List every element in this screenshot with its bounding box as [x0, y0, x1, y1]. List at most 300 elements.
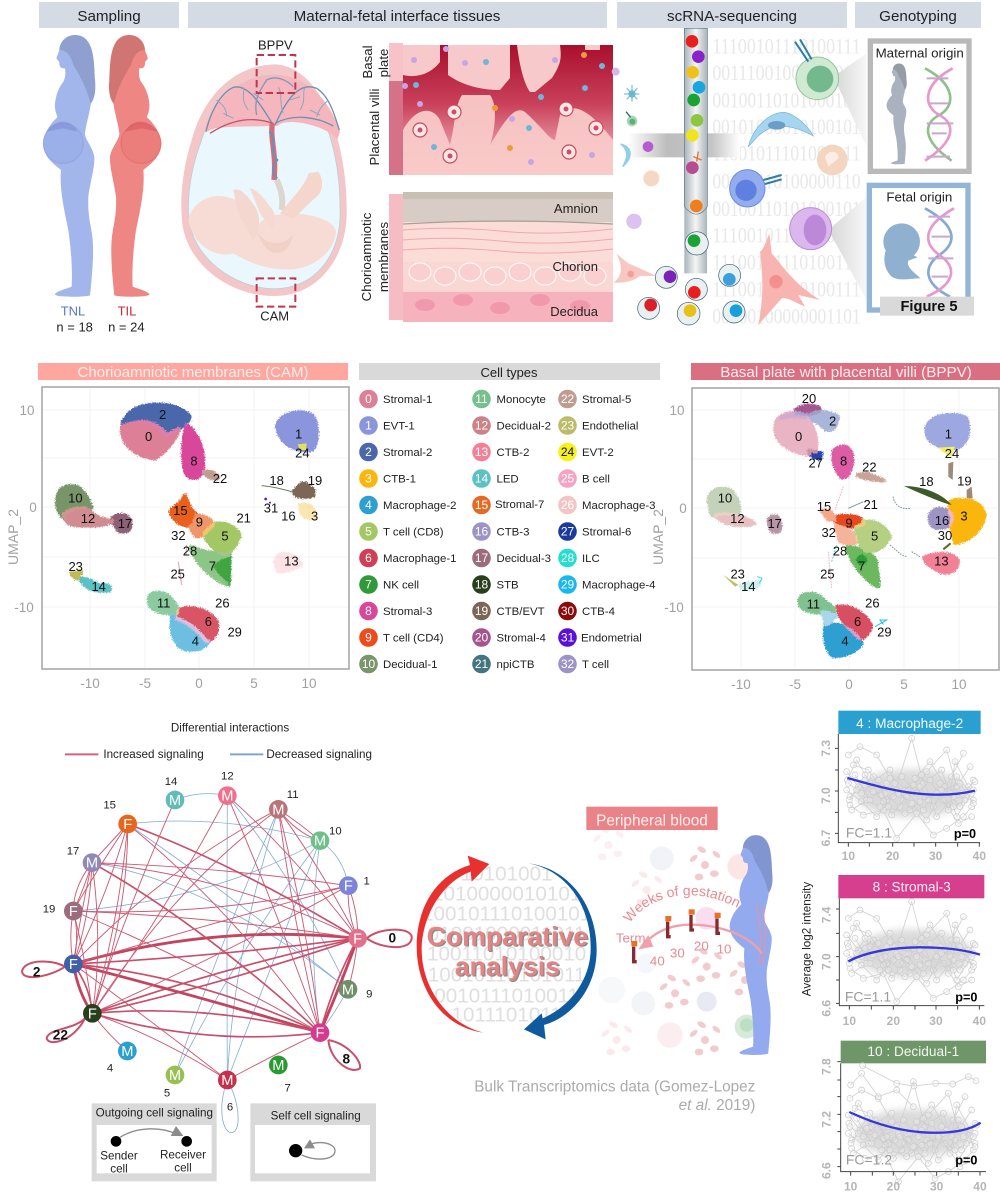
- clusters: [708, 391, 985, 657]
- nodes: M: [342, 982, 354, 998]
- legend column 2: STB: [496, 580, 519, 592]
- plot: 8 Stromal-3: 10: [843, 1014, 856, 1028]
- legend column 1: 1: [365, 418, 372, 432]
- plot: 8 Stromal-3: p=0: [955, 990, 977, 1004]
- plot: 8 Stromal-3: 8 : Stromal-3: [873, 880, 951, 895]
- node numbers: 11: [287, 789, 299, 801]
- cluster number labels: 26: [865, 595, 880, 610]
- key: Self cell signaling: [250, 1103, 376, 1181]
- axis labels: 10: [951, 677, 967, 692]
- axis labels: -10: [14, 600, 34, 615]
- plot: 4 Macrophage-2: 7.3: [819, 740, 833, 757]
- heading: Cell types: Cell types: [480, 365, 538, 380]
- cluster number labels: 1: [295, 426, 302, 441]
- encapsulated droplets: [638, 232, 745, 325]
- legend column 3: 28: [561, 551, 574, 565]
- plot: 10 Decidual-1: 6.6: [820, 1162, 834, 1179]
- node numbers: 5: [164, 1087, 170, 1099]
- week numbers: 30: [670, 946, 685, 961]
- legend column 1: EVT-1: [383, 420, 415, 432]
- legend: Increased signaling: Increased signaling: [103, 748, 204, 761]
- binary data background: 00101000010100101: [712, 114, 861, 139]
- plot: 10 Decidual-1: 10 : Decidual-1: [867, 1044, 959, 1059]
- cluster number labels: 10: [68, 490, 83, 505]
- axis labels: 0: [845, 677, 853, 692]
- plot: 8 Stromal-3: 40: [973, 1014, 986, 1028]
- genotype box: Maternal origin: [870, 41, 969, 171]
- legend column 2: 18: [475, 578, 488, 592]
- legend column 3: EVT-2: [582, 447, 614, 459]
- plot: 4 Macrophage-2: 7.0: [819, 787, 833, 804]
- cluster number labels: 21: [236, 511, 251, 526]
- nodes: M: [221, 789, 233, 805]
- axis labels: UMAP_2: [5, 509, 21, 565]
- genotype box: Fetal origin: Fetal origin: [886, 190, 952, 205]
- cluster number labels: 30: [938, 528, 952, 543]
- cluster number labels: 28: [833, 543, 847, 558]
- legend column 2: 17: [475, 551, 488, 565]
- legend column 1: [359, 390, 456, 673]
- cluster number labels: 1: [945, 426, 952, 441]
- legend column 2: Monocyte: [496, 394, 546, 406]
- node numbers: 17: [67, 845, 79, 857]
- title: Differential interactions: Differential interactions: [171, 722, 289, 735]
- nodes: F: [353, 931, 362, 947]
- cluster number labels: 19: [308, 473, 322, 488]
- nodes: M: [169, 793, 181, 809]
- legend column 3: 26: [561, 498, 574, 512]
- cell: green monocyte: [735, 1015, 759, 1039]
- label: Comparative analysis: [427, 921, 589, 983]
- plot: 4 Macrophage-2: 40: [973, 849, 986, 863]
- legend column 3: 27: [561, 524, 574, 538]
- axis labels: -10: [80, 676, 100, 691]
- axis labels: 0: [679, 501, 687, 516]
- cluster number labels: 16: [281, 509, 296, 524]
- node numbers: 6: [227, 1102, 233, 1114]
- cluster number labels: 3: [960, 509, 968, 524]
- panel: sampling women: [43, 35, 161, 334]
- week numbers: [650, 938, 731, 969]
- plot: 10 Decidual-1: p=0: [955, 1154, 977, 1168]
- plot: 4 Macrophage-2: 6.7: [819, 829, 833, 846]
- nodes: F: [316, 1026, 325, 1042]
- label: Placental villi: Placental villi: [367, 89, 382, 165]
- cluster number labels: 0: [145, 429, 152, 444]
- header: Sampling: Sampling: [77, 8, 141, 25]
- free floating cells: [612, 68, 659, 229]
- key: Outgoing cell signaling: [92, 1103, 217, 1181]
- legend column 3: Macrophage-3: [582, 500, 655, 512]
- heading: Cell types: [359, 363, 660, 380]
- axis labels: 0: [195, 676, 203, 691]
- cluster number labels: 6: [205, 614, 212, 629]
- cluster number labels: 14: [741, 579, 756, 594]
- binary data background: 00111001001110011: [712, 60, 861, 85]
- legend column 1: 7: [365, 578, 372, 592]
- callout: Figure 5: [880, 297, 974, 316]
- nodes: M: [86, 856, 98, 872]
- bar: placental villi: [389, 81, 403, 175]
- plot: 10 Decidual-1: 30: [930, 1180, 944, 1194]
- nodes: M: [221, 1073, 233, 1089]
- header: Sampling: [39, 2, 179, 28]
- axis labels: UMAP_2: [650, 509, 666, 565]
- CAM dashed box: [257, 278, 295, 307]
- legend: cell types: [359, 390, 655, 673]
- node numbers: 12: [221, 771, 234, 783]
- cluster number labels: 2: [159, 407, 166, 422]
- legend column 1: 9: [365, 630, 372, 644]
- nodes: [64, 786, 367, 1089]
- cluster number labels: 18: [269, 473, 284, 488]
- plot: 4 Macrophage-2: [819, 711, 986, 863]
- cluster number labels: 29: [227, 624, 242, 639]
- label: CAM: CAM: [260, 308, 289, 323]
- binary circle background: [426, 866, 587, 1022]
- label: Comparative analysis: Comparative: [428, 923, 589, 953]
- cluster number labels: 19: [957, 473, 972, 488]
- bar: chorioamniotic membranes: [389, 194, 403, 320]
- legend column 2: 19: [475, 604, 488, 618]
- genotype box: Maternal origin: Maternal origin: [876, 45, 964, 60]
- node numbers: 14: [165, 776, 177, 788]
- cluster number labels: 22: [862, 459, 877, 474]
- legend column 3: 25: [561, 472, 574, 486]
- key: Self cell signaling: Self cell signaling: [271, 1109, 361, 1122]
- cluster number labels: 15: [173, 503, 188, 518]
- cluster number labels: 8: [840, 453, 847, 468]
- nodes: M: [272, 802, 284, 818]
- cluster number labels: 9: [845, 515, 853, 530]
- panel: peripheral blood: [474, 806, 772, 1114]
- plot: 10 Decidual-1: 20: [887, 1180, 900, 1194]
- legend column 1: 8: [365, 604, 372, 618]
- legend column 3: 29: [561, 578, 574, 592]
- cluster number labels: 32: [171, 528, 186, 543]
- nodes: M: [121, 1044, 133, 1060]
- legend column 3: Macrophage-4: [582, 580, 655, 592]
- cluster number labels: 13: [934, 553, 949, 568]
- cluster number labels: 3: [311, 509, 318, 524]
- cluster number labels: 0: [795, 429, 802, 444]
- cluster number labels: 17: [118, 516, 132, 531]
- cluster number labels: 12: [730, 511, 745, 526]
- cluster number labels: 5: [871, 529, 878, 544]
- self-signaling loops: [22, 930, 412, 1070]
- cluster number labels: 25: [170, 566, 185, 581]
- cluster number labels: 27: [808, 456, 823, 471]
- node numbers: 19: [43, 904, 55, 916]
- gray cones to genotype boxes: [828, 53, 867, 300]
- label: Comparative analysis: Comparative: [427, 921, 588, 951]
- plot: 8 Stromal-3: [820, 875, 986, 1028]
- legend column 3: B cell: [582, 474, 610, 486]
- binary data background: [712, 33, 861, 328]
- plot: 10 Decidual-1: FC=1.2: [846, 1151, 892, 1167]
- cluster number labels: 6: [854, 614, 861, 629]
- binary circle background: 100101110100101: [422, 903, 591, 926]
- key: Outgoing cell signaling: cell: [110, 1162, 128, 1175]
- legend column 1: CTB-1: [383, 474, 416, 486]
- cell: small pink stromal: [613, 253, 657, 283]
- label: Comparative analysis: analysis: [455, 951, 560, 981]
- key: Outgoing cell signaling: Receiver: [160, 1149, 206, 1162]
- plot: 10 Decidual-1: 40: [973, 1180, 987, 1194]
- panel: uterus with fetus: [181, 37, 347, 323]
- node numbers: 7: [285, 1082, 291, 1094]
- legend column 2: 16: [475, 524, 488, 538]
- legend column 1: 5: [365, 524, 372, 538]
- label: Comparative analysis: analysis: [456, 953, 561, 983]
- label: Amnion: Amnion: [554, 201, 598, 216]
- cluster number labels: 4: [192, 633, 199, 648]
- legend column 1: 10: [362, 657, 375, 671]
- header: Genotyping: [855, 2, 981, 28]
- legend column 3: T cell: [582, 659, 609, 671]
- nodes: F: [69, 904, 78, 920]
- nodes: M: [314, 834, 326, 850]
- cluster number labels: 13: [284, 553, 299, 568]
- node numbers: 9: [366, 988, 372, 1000]
- node numbers: 2: [33, 964, 41, 979]
- axis labels: -5: [139, 676, 151, 691]
- plot: 4 Macrophage-2: 4 : Macrophage-2: [856, 716, 963, 731]
- legend column 3: 32: [561, 657, 574, 671]
- heading: Peripheral blood: [586, 807, 718, 830]
- cluster number labels: 22: [213, 471, 227, 486]
- cluster number labels: 18: [919, 474, 934, 489]
- legend column 2: 14: [475, 472, 488, 486]
- week numbers: 40: [650, 954, 665, 969]
- legend column 2: Decidual-2: [496, 420, 551, 432]
- cluster number labels: 10: [718, 490, 732, 505]
- arrow: blue clockwise: [524, 863, 597, 1039]
- legend column 2: CTB-2: [496, 447, 529, 459]
- axis labels: -10: [731, 677, 751, 692]
- node numbers: 8: [343, 1052, 351, 1067]
- cluster number labels: 7: [209, 558, 216, 573]
- label: TNL: TNL: [61, 304, 85, 319]
- cell: blue macrophage: [748, 112, 813, 147]
- legend column 1: Stromal-3: [383, 606, 432, 618]
- binary data background: 11100101110100111: [712, 277, 861, 302]
- cell: blue T cell: [730, 170, 782, 207]
- legend column 3: Endothelial: [582, 420, 638, 432]
- plot: 10 Decidual-1: 7.8: [820, 1058, 834, 1075]
- plot: 4 Macrophage-2: FC=1.1: [846, 824, 892, 840]
- key: Outgoing cell signaling: Outgoing cell signaling: [96, 1107, 213, 1120]
- plot: 4 Macrophage-2: 20: [886, 849, 900, 863]
- cluster number labels: 29: [877, 624, 892, 639]
- week numbers: 20: [694, 938, 709, 953]
- binary data background: 11001011101001011: [712, 141, 861, 166]
- node numbers: 22: [53, 1028, 68, 1043]
- edges: decreased signaling: [73, 794, 348, 1133]
- binary circle background: 01001000011011: [428, 923, 586, 946]
- label: Chorioamniotic: Chorioamniotic: [359, 212, 374, 301]
- label: Chorion: Chorion: [552, 259, 598, 274]
- plot: 10 Decidual-1: [820, 1041, 987, 1194]
- cluster number labels: 5: [221, 529, 229, 544]
- legend column 3: Endometrial: [581, 632, 642, 644]
- legend column 1: 0: [365, 392, 372, 406]
- cluster number labels: 23: [68, 559, 83, 574]
- citation: et al. 2019): [679, 1097, 755, 1114]
- legend column 2: Stromal-4: [496, 632, 546, 644]
- axis labels: 10: [301, 676, 317, 691]
- plot: 10 Decidual-1: 7.2: [820, 1111, 834, 1128]
- legend column 1: 4: [365, 498, 372, 512]
- cluster number labels: 2: [829, 414, 836, 429]
- cluster number labels: 15: [817, 499, 831, 514]
- legend column 1: Macrophage-2: [383, 500, 456, 512]
- nodes: M: [272, 1058, 284, 1074]
- plot: 4 Macrophage-2: 10: [842, 849, 855, 863]
- axis labels: 5: [250, 676, 258, 691]
- legend column 2: Decidual-3: [496, 553, 551, 565]
- axis labels: [5, 403, 317, 691]
- cluster number labels: 26: [215, 595, 230, 610]
- legend column 3: ILC: [582, 553, 600, 565]
- legend column 3: 30: [561, 604, 574, 618]
- axis labels: [650, 403, 967, 692]
- axis labels: 10: [19, 403, 35, 418]
- droplet beads: [686, 35, 705, 212]
- label: Term: Term: [616, 931, 645, 946]
- legend column 2: 21: [475, 657, 488, 671]
- bar: basal plate: [389, 43, 403, 81]
- icon: woman profile blue: [730, 835, 773, 1055]
- legend column 2: CTB/EVT: [496, 606, 545, 618]
- heading: Peripheral blood: Peripheral blood: [596, 812, 708, 829]
- cluster number labels: 9: [196, 515, 203, 530]
- clusters: [57, 404, 322, 650]
- placenta: [204, 75, 340, 139]
- nodes: F: [88, 1006, 97, 1022]
- UMAP chart: BPPV: [650, 388, 999, 692]
- legend column 2: 12: [475, 418, 488, 432]
- legend column 3: Stromal-6: [582, 526, 631, 538]
- legend column 1: T cell (CD8): [383, 526, 444, 538]
- fetus: [188, 172, 336, 269]
- BPPV dashed box: [257, 55, 295, 93]
- legend column 2: [472, 390, 551, 673]
- cluster number labels: 11: [157, 595, 170, 610]
- binary circle background: 10101001: [461, 863, 553, 886]
- legend column 3: 31: [561, 630, 574, 644]
- week numbers: 10: [717, 941, 731, 956]
- nodes: M: [169, 1068, 181, 1084]
- binary data background: 11100101110100111: [712, 223, 861, 248]
- legend column 3: 24: [561, 445, 574, 459]
- axis labels: 5: [900, 677, 908, 692]
- label: Weeks of gestation on arc: [622, 842, 773, 966]
- label: n = 24: n = 24: [108, 319, 145, 334]
- header: Maternal-fetal interface tissues: Maternal-fetal interface tissues: [294, 8, 501, 25]
- binary circle background: 10010110101011: [428, 964, 586, 987]
- header: scRNA-sequencing: [617, 2, 847, 28]
- panel: chorioamniotic membrane tissue: [403, 192, 613, 322]
- cluster number labels: 8: [190, 454, 198, 469]
- legend column 2: 15: [475, 498, 488, 512]
- y axis title: Average log2 intensity: [801, 882, 814, 996]
- icon: TNL pregnant woman: [43, 35, 95, 297]
- legend column 2: 20: [475, 630, 488, 644]
- label: TIL: TIL: [118, 304, 136, 319]
- cluster number labels: 24: [945, 446, 959, 461]
- icon: TIL pregnant woman: [109, 35, 161, 297]
- axis labels: 10: [669, 403, 685, 418]
- umbilical cord: [269, 123, 282, 210]
- cell: tan monocyte: [817, 145, 848, 175]
- binary data background: 00100100000001101: [712, 303, 861, 328]
- legend column 3: Stromal-5: [582, 394, 631, 406]
- plot: 8 Stromal-3: 20: [887, 1014, 900, 1028]
- cluster number labels: 31: [264, 500, 278, 515]
- header: scRNA-sequencing: scRNA-sequencing: [667, 8, 797, 25]
- legend column 1: 2: [365, 445, 372, 459]
- node numbers: 1: [364, 876, 370, 888]
- legend column 1: Macrophage-1: [383, 553, 456, 565]
- droplet tube: [684, 28, 707, 273]
- legend column 2: npiCTB: [496, 659, 534, 671]
- plot: 10 Decidual-1: 10: [844, 1180, 858, 1194]
- legend column 1: Stromal-2: [383, 447, 432, 459]
- cluster number labels: 7: [858, 558, 865, 573]
- label: membranes: membranes: [376, 222, 391, 292]
- legend column 1: Decidual-1: [383, 659, 437, 671]
- legend column 3: 23: [561, 418, 574, 432]
- legend column 1: Stromal-1: [383, 394, 432, 406]
- label: Basal plate: Basal: [360, 45, 375, 79]
- header: Maternal-fetal interface tissues: [188, 2, 607, 28]
- cluster number labels: 20: [802, 391, 816, 406]
- binary circle background: 1011101011: [452, 1004, 562, 1027]
- axis labels: 0: [29, 500, 37, 515]
- legend column 2: 13: [475, 445, 488, 459]
- arrow: red clockwise: [417, 856, 489, 1033]
- legend column 3: CTB-4: [582, 606, 615, 618]
- node numbers: [33, 771, 397, 1114]
- citation: Bulk Transcriptomics data (Gomez-Lopez: [474, 1079, 755, 1096]
- key: Outgoing cell signaling: cell: [174, 1161, 192, 1174]
- node numbers: 15: [103, 800, 116, 812]
- binary data background: 11100101110100111: [712, 249, 861, 274]
- plot: 8 Stromal-3: FC=1.1: [845, 988, 891, 1004]
- nodes: F: [344, 879, 353, 895]
- cluster number labels: 25: [820, 566, 835, 581]
- cluster number labels: 28: [183, 543, 197, 558]
- binary data background: 00100110100000110: [712, 169, 861, 194]
- nodes: F: [69, 957, 78, 973]
- plot: 8 Stromal-3: 7.0: [820, 953, 834, 970]
- label: n = 18: n = 18: [56, 319, 93, 334]
- vessels: [206, 78, 339, 133]
- cluster number labels: 16: [935, 513, 949, 528]
- cluster number labels: [718, 391, 972, 648]
- panel: differential interactions network: [22, 722, 412, 1181]
- legend column 2: Stromal-7: [495, 499, 544, 511]
- cluster number labels: 12: [81, 511, 95, 526]
- cell: green lymphocyte: [795, 39, 839, 100]
- axis labels: -10: [664, 600, 684, 615]
- heading: Basal plate with placental villi (BPPV): Basal plate with placental villi (BPPV): [720, 364, 972, 381]
- genotype box: Fetal origin: [869, 185, 968, 310]
- citation: [474, 1079, 755, 1114]
- axis labels: -5: [789, 677, 801, 692]
- legend column 1: 6: [365, 551, 372, 565]
